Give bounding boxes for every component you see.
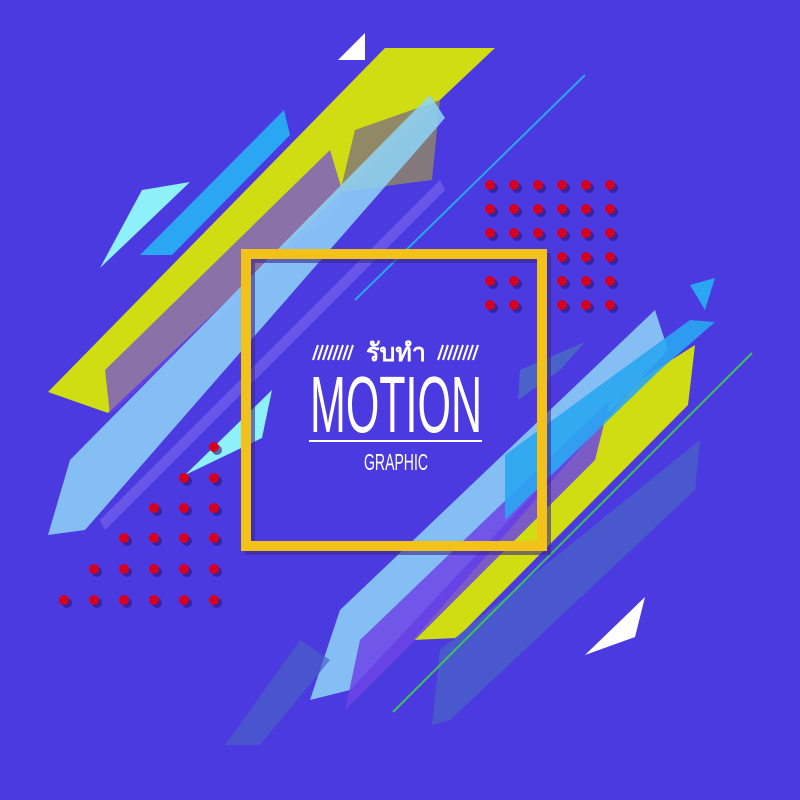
shapes: left cluster — [48, 33, 585, 535]
MOTION: MOTION — [310, 360, 482, 449]
GRAPHIC: GRAPHIC — [364, 449, 428, 475]
yellow frame — [246, 254, 542, 546]
title block — [309, 339, 482, 475]
red dot grid top right — [485, 180, 615, 310]
shapes: right cluster — [225, 278, 752, 745]
red dot grid bottom left — [59, 442, 219, 605]
thai heading: รับทำ — [366, 339, 426, 367]
icon: cyan arrow triangle — [185, 390, 272, 475]
stripes — [313, 345, 478, 360]
